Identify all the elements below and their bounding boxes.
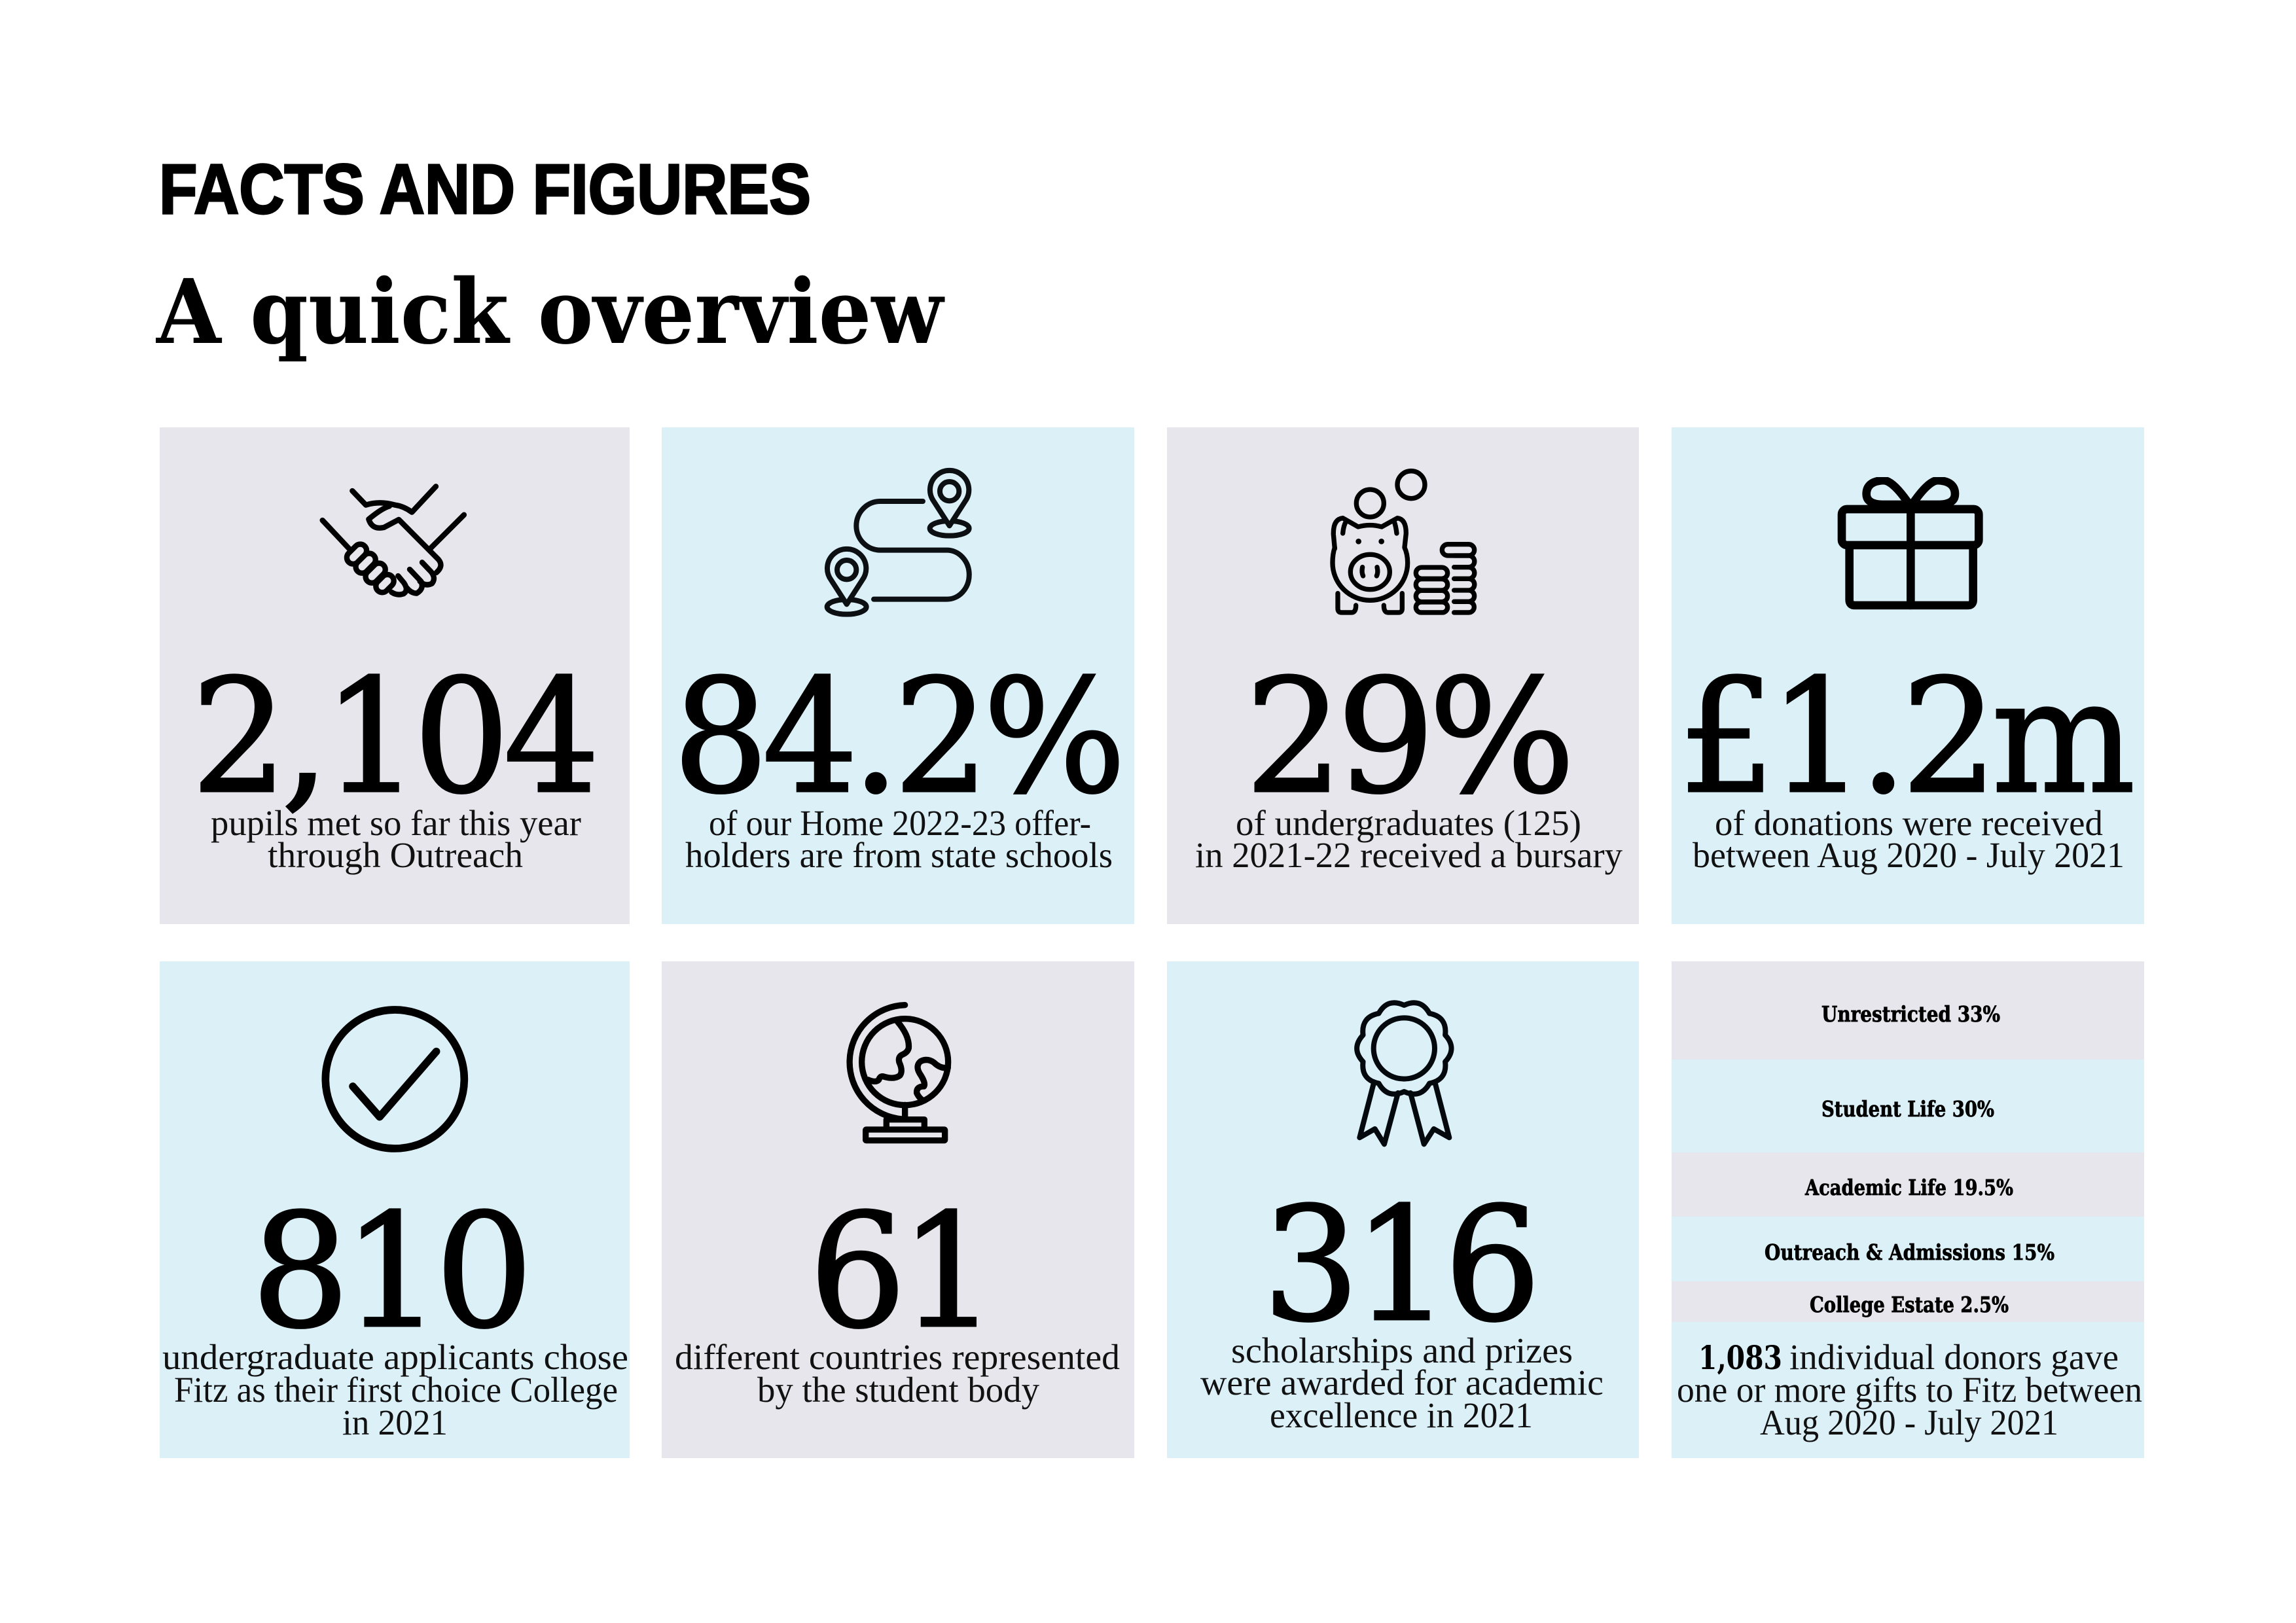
caption: [1200, 1330, 1604, 1435]
panel: donations: [1672, 427, 2144, 924]
caption: by the student body: [757, 1370, 1039, 1410]
strip: individual donors: 1,083: [1698, 1338, 1782, 1377]
caption: of undergraduates (125): [1236, 803, 1581, 843]
caption: of donations were received: [1715, 803, 2103, 843]
number: 29%: 29%: [1245, 645, 1569, 829]
caption: holders are from state schools: [685, 835, 1113, 875]
icon: route with map pins: [827, 471, 969, 615]
icon: handshake: [323, 486, 464, 595]
icon: desk globe: [850, 1005, 948, 1141]
panel: first choice applicants: [160, 961, 630, 1458]
panel: donation breakdown: [1672, 961, 2144, 1458]
caption: [1195, 803, 1623, 875]
caption: [162, 1337, 628, 1442]
caption: between Aug 2020 - July 2021: [1693, 835, 2125, 875]
strip: academic life: Academic Life 19.5%: [1804, 1175, 2013, 1200]
icon: gift box: [1842, 480, 1979, 605]
strip: student life: [1672, 1060, 2144, 1152]
caption: [675, 1337, 1120, 1410]
strip: unrestricted: Unrestricted 33%: [1821, 1001, 2000, 1027]
number: 2,104: 2,104: [191, 645, 594, 829]
caption: scholarships and prizes: [1231, 1330, 1573, 1370]
caption: in 2021: [342, 1402, 448, 1442]
icon: piggy bank and coins: [1333, 471, 1475, 613]
strip: individual donors: Aug 2020 - July 2021: [1760, 1402, 2058, 1442]
strip: student life: Student Life 30%: [1821, 1096, 1994, 1122]
strip: outreach and admissions: [1672, 1217, 2144, 1281]
number: 316: 316: [1263, 1173, 1535, 1357]
caption: [211, 803, 581, 875]
caption: excellence in 2021: [1270, 1395, 1533, 1435]
number: 61: 61: [809, 1180, 991, 1363]
caption: pupils met so far this year: [211, 803, 581, 843]
caption: different countries represented: [675, 1337, 1120, 1377]
caption: in 2021-22 received a bursary: [1195, 835, 1623, 875]
number: 84.2%: 84.2%: [673, 645, 1120, 829]
caption: Fitz as their first choice College: [174, 1370, 618, 1410]
panel: scholarships: [1167, 961, 1639, 1458]
panel: countries: [662, 961, 1134, 1458]
caption: of our Home 2022-23 offer-: [709, 803, 1091, 843]
strip: college estate: College Estate 2.5%: [1810, 1292, 2009, 1317]
strip: college estate: [1672, 1281, 2144, 1322]
strip: individual donors: one or more gifts to Fitz between: [1677, 1370, 2142, 1410]
number: £1.2m: £1.2m: [1679, 645, 2132, 829]
caption: were awarded for academic: [1200, 1363, 1604, 1402]
title: a quick overview: A quick overview: [155, 260, 945, 365]
icon: check mark in circle: [325, 1010, 464, 1149]
number: 810: 810: [251, 1180, 527, 1363]
caption: [1693, 803, 2125, 875]
caption: through Outreach: [268, 835, 523, 875]
heading: facts and figures: FACTS AND FIGURES: [159, 149, 811, 228]
strip: individual donors: [1672, 1322, 2144, 1458]
panel: state schools: [662, 427, 1134, 924]
panel: pupils met: [160, 427, 630, 924]
strip: individual donors: individual donors gave: [1789, 1337, 2119, 1377]
strip: academic life: [1672, 1152, 2144, 1217]
caption: [685, 803, 1113, 875]
strip: outreach and admissions: Outreach & Admissions 15%: [1765, 1240, 2054, 1265]
strip: unrestricted: [1672, 961, 2144, 1060]
icon: rosette: [1357, 1003, 1452, 1144]
caption: undergraduate applicants chose: [162, 1337, 628, 1377]
panel: bursary: [1167, 427, 1639, 924]
